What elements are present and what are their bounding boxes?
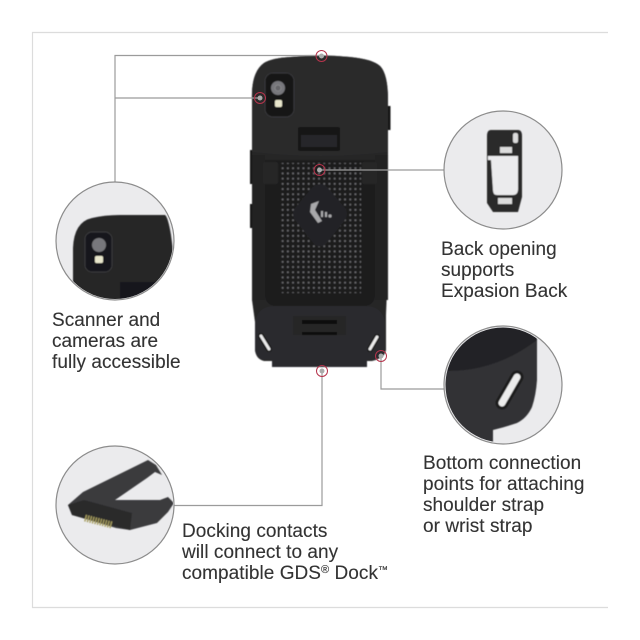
diamond logo plate <box>293 184 347 246</box>
text: back opening: Expasion Back <box>441 281 568 302</box>
text: scanner and cameras: fully accessible <box>52 352 181 373</box>
strap slots <box>261 336 269 349</box>
marker: top scanner <box>316 50 327 62</box>
circle: strap point detail <box>440 320 562 450</box>
text: bottom connection points: points for attaching <box>423 474 585 495</box>
top cover <box>252 56 388 156</box>
text: docking contacts: ® <box>321 564 329 576</box>
rear clip <box>298 127 340 151</box>
bottom slot <box>293 316 346 335</box>
marker: docking <box>316 366 328 376</box>
text: scanner and cameras: cameras are <box>52 331 158 352</box>
side rails <box>252 155 388 300</box>
circle: scanner and cameras detail <box>56 182 180 305</box>
text: docking contacts: Docking contacts <box>182 521 327 542</box>
text: docking contacts: Dock <box>329 563 378 584</box>
circle: expansion back detail <box>444 111 562 229</box>
camera module <box>265 73 294 117</box>
dotted grille <box>280 163 361 293</box>
text: back opening: Back opening <box>441 239 557 260</box>
marker: back opening <box>314 164 325 176</box>
text: bottom connection points: or wrist strap <box>423 516 532 537</box>
text: docking contacts: compatible GDS <box>182 563 321 584</box>
text: scanner and cameras: Scanner and <box>52 310 160 331</box>
logo <box>310 201 332 223</box>
back panel <box>265 160 375 306</box>
side buttons <box>387 106 390 130</box>
text: docking contacts: will connect to any <box>181 542 339 563</box>
text: bottom connection points: Bottom connection <box>423 453 581 474</box>
device body <box>252 56 388 367</box>
text: docking contacts: ™ <box>378 565 388 576</box>
leader lines <box>115 56 445 506</box>
text: back opening: supports <box>441 260 514 281</box>
device: rugged phone back <box>250 56 390 367</box>
marker: strap point <box>376 350 386 362</box>
lower frame <box>255 306 385 367</box>
text: bottom connection points: shoulder strap <box>423 495 544 516</box>
circle: docking contacts detail <box>56 446 174 564</box>
marker: camera <box>254 92 266 104</box>
